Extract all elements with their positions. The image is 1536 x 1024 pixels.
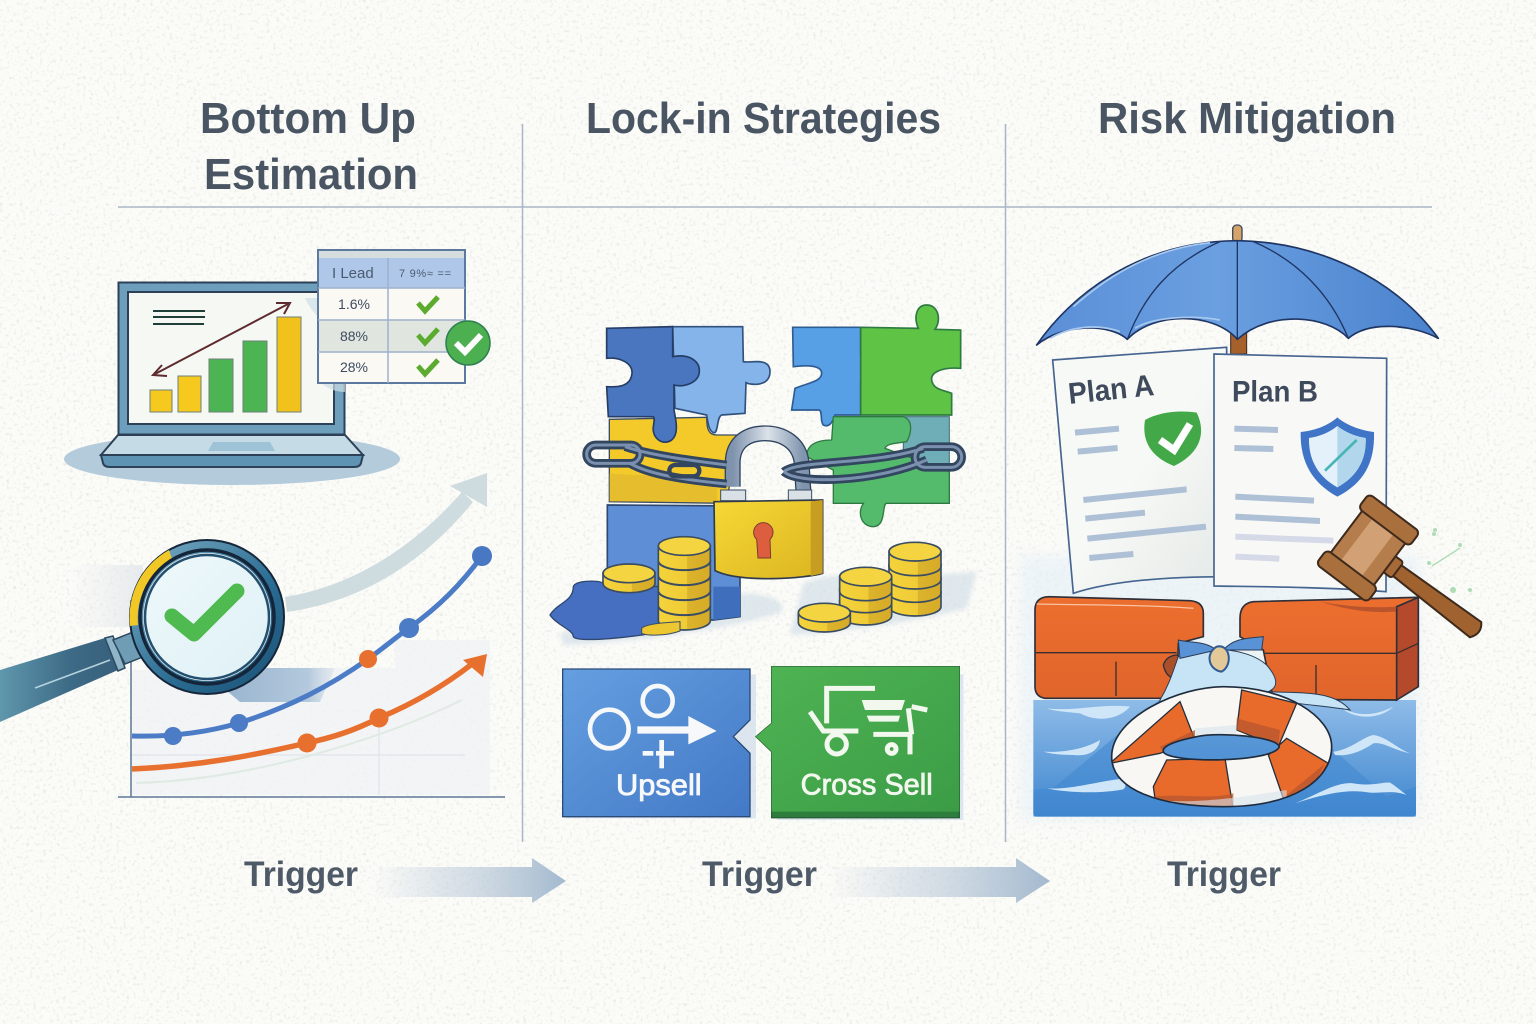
trigger label 2: Trigger (702, 855, 817, 894)
heading: Bottom Up Estimation (200, 94, 418, 199)
coin stacks right (798, 542, 941, 632)
laptop (101, 282, 363, 467)
ground shadows (560, 572, 977, 645)
light blue puzzle piece (673, 327, 770, 433)
umbrella (1037, 225, 1438, 354)
card: cross sell (756, 667, 963, 820)
label: Plan A: Plan A (1067, 369, 1156, 411)
growth chart (73, 546, 505, 797)
teal puzzle piece (903, 417, 949, 467)
lead table: 7 9%≈ == (399, 268, 451, 280)
lead table: 28% (340, 359, 368, 375)
gavel (1316, 494, 1505, 667)
double-headed trend arrow (153, 303, 290, 376)
document: plan B (1214, 354, 1387, 592)
heading: Lock-in Strategies: Lock-in Strategies (586, 94, 941, 143)
arrow 1 (375, 858, 566, 903)
blue right puzzle piece (792, 327, 887, 426)
trigger label 1: Trigger (244, 855, 358, 894)
heading: Bottom Up Estimation: Bottom Up (200, 94, 416, 143)
lead table: 1.6% (338, 296, 370, 312)
arrow 2 (830, 858, 1050, 903)
padlock body (714, 490, 823, 579)
lead table (318, 250, 465, 383)
panel: lock-in strategies (550, 305, 977, 645)
trigger label 3: Trigger (1167, 855, 1281, 894)
waves (1043, 706, 1410, 803)
background growth arrow (285, 473, 487, 612)
text lines B (1234, 429, 1333, 559)
heading: Bottom Up Estimation: Estimation (204, 150, 418, 199)
lead table: I Lead (332, 265, 374, 282)
patch sack and tie (1160, 637, 1350, 710)
chain right (784, 447, 962, 480)
panel: bottom up estimation (0, 250, 505, 797)
water panel (1033, 597, 1418, 817)
document: plan A (1053, 347, 1227, 593)
orange series line (132, 654, 487, 769)
label: Plan B: Plan B (1232, 375, 1318, 408)
green splatter (1427, 528, 1472, 593)
bar chart on screen (150, 317, 301, 412)
lower green puzzle piece (807, 417, 949, 527)
laptop shadow (64, 433, 400, 485)
chain left (587, 445, 727, 484)
icon: blue shield (1301, 417, 1374, 497)
heading: Risk Mitigation: Risk Mitigation (1098, 94, 1396, 143)
icon: green shield check (1144, 411, 1201, 466)
faint background strips (73, 565, 335, 702)
lime green puzzle piece (861, 305, 961, 415)
lead table: 88% (340, 328, 368, 344)
icon: upsell arrow and circles (590, 686, 717, 768)
blue puddle piece (550, 581, 660, 639)
screen heading lines (153, 311, 205, 324)
panel dividers (118, 124, 1432, 842)
label: Cross Sell: Cross Sell (801, 768, 933, 801)
coin stack left (603, 537, 710, 635)
brick wall left (1035, 597, 1203, 698)
magnifying glass (0, 539, 285, 722)
lower blue block (607, 505, 740, 620)
brick wall right (1240, 597, 1418, 700)
green check badge (446, 321, 490, 365)
padlock shackle (733, 433, 803, 490)
lifebuoy ring (1107, 683, 1340, 810)
label: Upsell: Upsell (616, 769, 702, 802)
card: upsell (563, 669, 756, 818)
panel: risk mitigation backdrop (1020, 555, 1420, 820)
text lines A (1075, 429, 1206, 558)
yellow puzzle piece (609, 417, 737, 503)
dark blue puzzle piece (607, 327, 699, 442)
blue series line (132, 546, 492, 745)
icon: shopping carts (810, 688, 927, 754)
